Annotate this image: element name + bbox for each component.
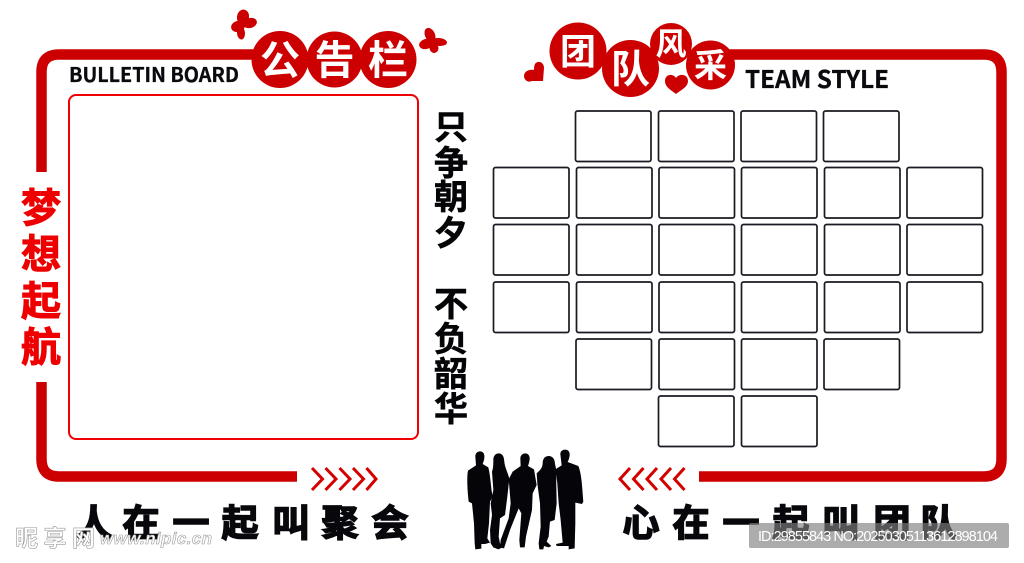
heading: team style badges: 风 [656, 19, 686, 64]
text: bottom left slogan: 在 [122, 493, 160, 547]
text: bottom left slogan: 人 [76, 493, 112, 547]
heading: team style badges: 团 [560, 23, 596, 75]
text: vertical slogan middle: 韶 [434, 347, 468, 396]
text: source watermark: 昵享网 [15, 519, 95, 553]
heading: team style badges: 采 [694, 39, 727, 87]
text: vertical slogan middle: 不 [434, 277, 468, 326]
text: bottom right slogan: 心 [622, 493, 660, 547]
text: bottom left slogan [76, 493, 408, 547]
chart: heart-shaped photo grid [494, 111, 982, 446]
icon: butterfly right [418, 26, 447, 54]
text: bottom left slogan: 叫 [272, 493, 310, 547]
text: bottom right slogan: 团 [874, 493, 910, 547]
icon: heart centre [665, 75, 688, 94]
text: vertical slogan middle: 负 [434, 312, 468, 361]
heading: bulletin board badges: 告 [314, 28, 354, 86]
text: bottom left slogan: 聚 [322, 493, 358, 547]
text: vertical slogan middle [434, 100, 468, 431]
text: vertical slogan left: 想 [21, 222, 61, 280]
text: bottom right slogan: 起 [772, 493, 810, 547]
text: vertical slogan left [21, 176, 61, 373]
text: bottom right slogan: 一 [722, 493, 760, 547]
text: vertical slogan middle: 夕 [434, 206, 468, 255]
text: bottom right slogan: 在 [672, 493, 710, 547]
icon: heart left [524, 62, 544, 82]
text: bottom left slogan: 一 [172, 493, 210, 547]
heading: bulletin board badges: 公 [260, 28, 300, 86]
text: bottom right slogan [622, 493, 958, 547]
text: bottom right slogan: 叫 [822, 493, 860, 547]
heading: team style badges [550, 19, 735, 97]
heading: team style badges: 队 [611, 39, 650, 95]
text: bottom left slogan: 会 [372, 493, 408, 547]
heading: bulletin board badges: 栏 [368, 28, 408, 86]
text: bottom right slogan: 队 [920, 493, 958, 547]
text: bottom left slogan: 起 [222, 493, 258, 547]
text: vertical slogan middle: 朝 [434, 170, 468, 219]
panel: right red frame [699, 54, 1002, 476]
panel: bulletin notice board [69, 95, 418, 439]
heading: bulletin board English: BULLETIN BOARD [69, 59, 239, 88]
text: vertical slogan left: 起 [21, 269, 61, 327]
icon: team silhouette [467, 450, 583, 549]
heading: team style English: TEAM STYLE [745, 60, 889, 95]
text: vertical slogan middle: 只 [434, 100, 468, 149]
text: image id stamp: ID:29855843 NO:20250305113612898104 [758, 529, 998, 545]
text: vertical slogan left: 梦 [21, 176, 61, 234]
icon: butterfly left [230, 9, 258, 40]
arrow: left chevrons [620, 468, 684, 490]
panel: left red frame [42, 54, 297, 476]
text: vertical slogan middle: 华 [434, 382, 468, 431]
arrow: right chevrons [312, 468, 376, 490]
text: vertical slogan left: 航 [21, 315, 61, 373]
heading: bulletin board badges [252, 28, 416, 88]
text: source watermark: www.nipic.cn [100, 529, 212, 548]
text: source watermark [15, 519, 212, 553]
text: vertical slogan middle: 争 [434, 136, 468, 185]
text: image id stamp [749, 523, 1009, 548]
